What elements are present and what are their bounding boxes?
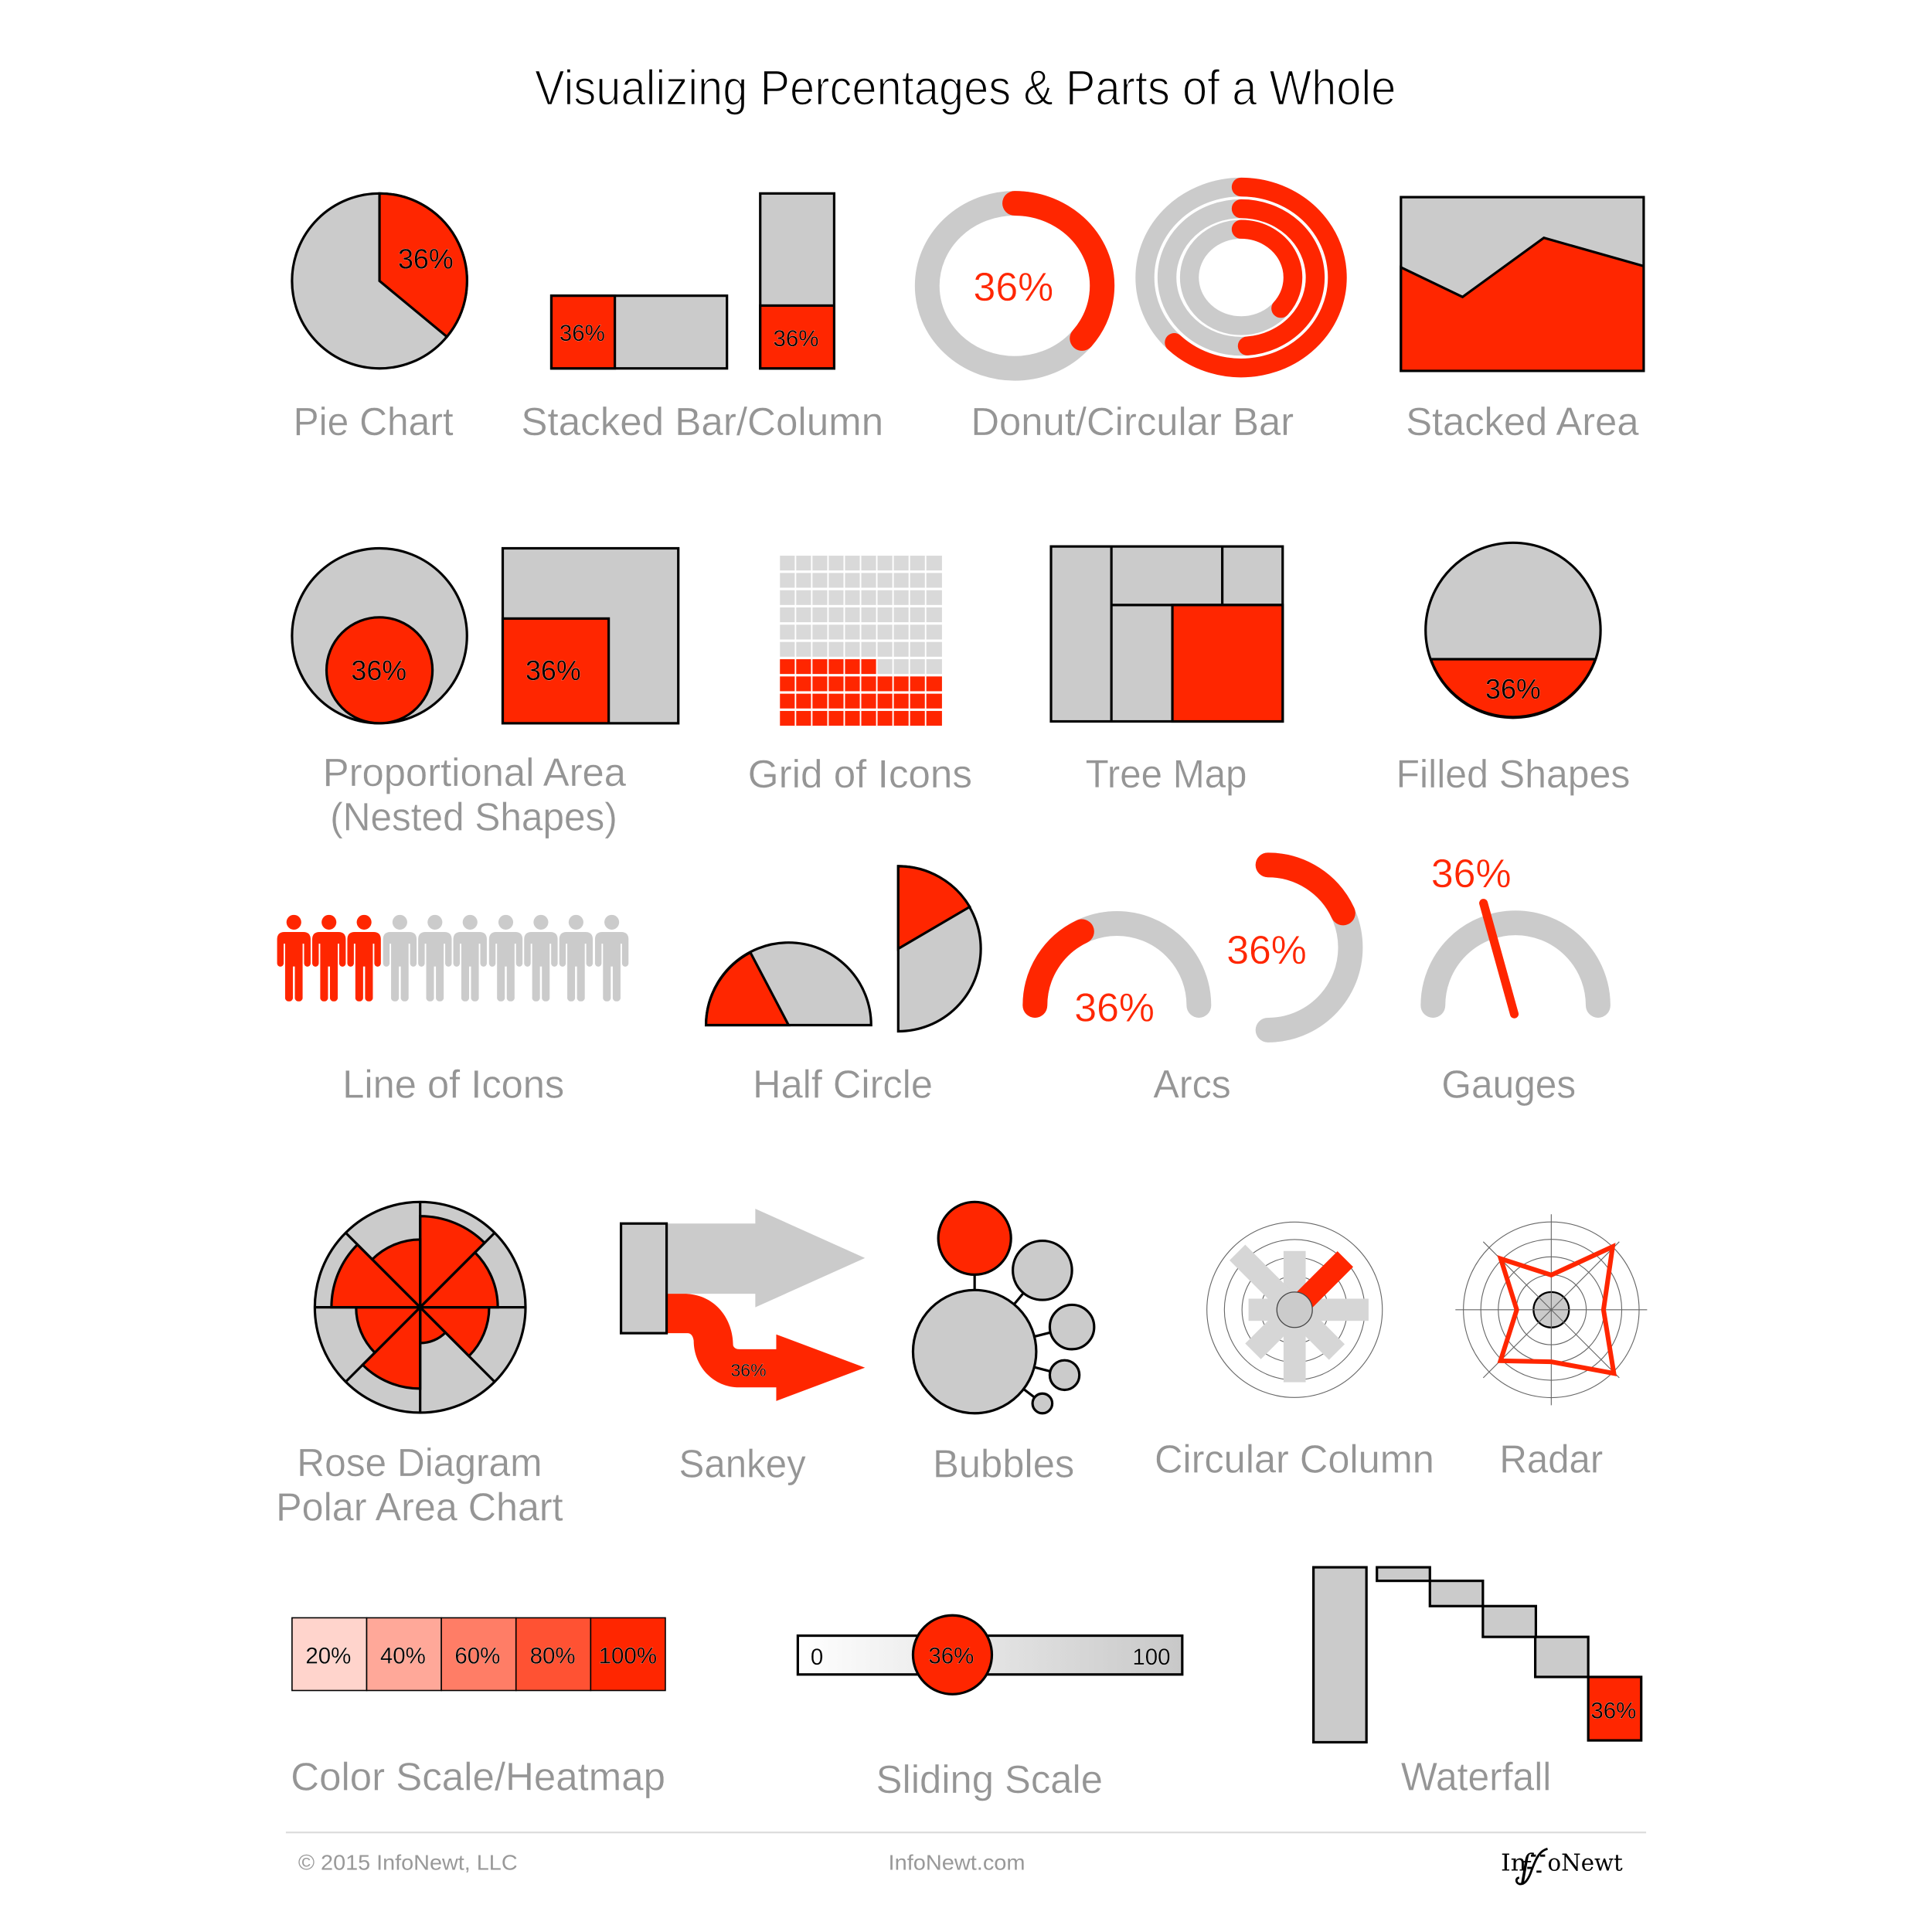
small bubbles bbox=[1013, 1241, 1094, 1413]
icon: lizard bbox=[1516, 1849, 1548, 1884]
rings bbox=[1207, 1222, 1383, 1397]
fill segment bbox=[1430, 659, 1595, 717]
gauge arc bbox=[1433, 923, 1598, 1005]
label: Stacked Bar/Column bbox=[521, 400, 883, 444]
panel: tree map bbox=[1051, 546, 1283, 796]
label: Filled Shapes bbox=[1396, 752, 1630, 796]
red tile bbox=[1172, 605, 1283, 722]
values: 36% bbox=[928, 1643, 974, 1668]
value: 36% bbox=[398, 244, 454, 275]
vertical half circle bbox=[898, 866, 981, 1032]
panel: donut and circular bar bbox=[927, 187, 1338, 444]
panel: circular column bbox=[1155, 1222, 1434, 1481]
gray flow bbox=[667, 1209, 865, 1308]
label: Bubbles bbox=[933, 1442, 1074, 1486]
nested squares bbox=[503, 549, 679, 723]
gray columns bbox=[1230, 1245, 1369, 1383]
label: Rose Diagram bbox=[297, 1440, 543, 1485]
label: Stacked Area bbox=[1406, 400, 1639, 444]
panel: stacked area bbox=[1401, 197, 1644, 444]
nested squares: 36% bbox=[526, 655, 581, 686]
gray people bbox=[383, 915, 628, 1002]
steps bbox=[1377, 1567, 1588, 1677]
stacked column bbox=[760, 193, 834, 369]
label line two: (Nested Shapes) bbox=[330, 795, 617, 839]
star line bbox=[1501, 1247, 1614, 1373]
label: Grid of Icons bbox=[748, 752, 972, 796]
label: Proportional Area bbox=[323, 750, 627, 794]
panel: rose diagram bbox=[276, 1202, 563, 1529]
cells bbox=[292, 1617, 665, 1691]
panel: line of icons bbox=[277, 915, 628, 1107]
red people bbox=[277, 915, 381, 1002]
panel: gauges bbox=[1431, 851, 1598, 1107]
horizontal arc bbox=[1035, 923, 1199, 1005]
outer circle bbox=[315, 1202, 526, 1413]
cell values: 20% bbox=[305, 1643, 351, 1668]
area bbox=[1401, 238, 1644, 371]
cell values: 40% bbox=[380, 1643, 426, 1668]
source block bbox=[621, 1223, 667, 1333]
pie slice bbox=[379, 193, 467, 337]
values: 0 bbox=[811, 1645, 823, 1670]
red flow bbox=[667, 1294, 865, 1401]
website: InfoNewt.com bbox=[889, 1850, 1026, 1874]
horizontal half circle bbox=[706, 943, 871, 1026]
label: Arcs bbox=[1153, 1063, 1231, 1107]
cell values: 60% bbox=[454, 1643, 500, 1668]
panel: pie chart bbox=[292, 193, 467, 444]
cell values: 80% bbox=[530, 1643, 576, 1668]
panel: proportional area bbox=[292, 549, 679, 839]
track bbox=[798, 1636, 1182, 1675]
red sectors bbox=[332, 1216, 498, 1389]
label: Color Scale/Heatmap bbox=[291, 1755, 665, 1799]
title: Visualizing Percentages & Parts of a Whole bbox=[535, 60, 1396, 116]
label: Half Circle bbox=[753, 1063, 933, 1107]
donut bbox=[927, 203, 1102, 369]
panel: stacked bar and column bbox=[521, 193, 883, 444]
logo: In bbox=[1501, 1849, 1526, 1876]
red column bbox=[1287, 1251, 1353, 1318]
value: 36% bbox=[1431, 851, 1512, 896]
connectors bbox=[975, 1238, 1072, 1403]
panel: radar bbox=[1455, 1214, 1647, 1481]
footer rule bbox=[286, 1832, 1646, 1833]
label: Donut/Circular Bar bbox=[971, 400, 1294, 444]
nested circles: 36% bbox=[351, 655, 406, 686]
value: 36% bbox=[1485, 674, 1541, 705]
label: Tree Map bbox=[1086, 752, 1247, 796]
circular bars bbox=[1145, 187, 1338, 368]
panel: color scale bbox=[291, 1617, 665, 1799]
tile dividers bbox=[1111, 546, 1283, 722]
big bubble bbox=[913, 1290, 1036, 1413]
label: Sankey bbox=[679, 1442, 806, 1486]
value: 36% bbox=[1226, 927, 1307, 972]
panel: half circle bbox=[706, 866, 981, 1107]
values bbox=[811, 1643, 1171, 1670]
panel: filled shapes bbox=[1396, 543, 1630, 796]
cell values bbox=[305, 1643, 657, 1668]
donut: 36% bbox=[974, 264, 1053, 309]
spokes bbox=[315, 1202, 526, 1413]
label line two: Polar Area Chart bbox=[276, 1485, 563, 1529]
label: Radar bbox=[1499, 1437, 1603, 1481]
panel: sliding scale bbox=[798, 1615, 1182, 1801]
hub bbox=[1277, 1292, 1312, 1328]
panel: waterfall bbox=[1314, 1567, 1641, 1799]
cell values: 100% bbox=[599, 1643, 657, 1668]
label: Gauges bbox=[1441, 1063, 1576, 1107]
value: 36% bbox=[1074, 985, 1155, 1030]
panel: grid of icons bbox=[748, 556, 972, 796]
value: 36% bbox=[730, 1360, 767, 1380]
values: 100 bbox=[1132, 1645, 1171, 1670]
label: Sliding Scale bbox=[876, 1757, 1103, 1801]
value: 36% bbox=[1590, 1698, 1636, 1723]
stacked column: 36% bbox=[773, 326, 818, 352]
vertical arc bbox=[1268, 865, 1350, 1030]
stacked bar: 36% bbox=[560, 321, 605, 346]
logo: oNewt bbox=[1548, 1849, 1623, 1876]
hub bbox=[1533, 1292, 1569, 1328]
logo: f bbox=[1520, 1845, 1534, 1884]
grid squares bbox=[780, 556, 942, 726]
label: Circular Column bbox=[1155, 1437, 1434, 1481]
marker bbox=[913, 1615, 992, 1694]
nested circles bbox=[292, 549, 467, 723]
total bar bbox=[1314, 1567, 1366, 1742]
stacked bar bbox=[551, 296, 727, 369]
panel: sankey bbox=[621, 1209, 865, 1486]
panel: bubbles bbox=[913, 1202, 1094, 1486]
red bubble bbox=[938, 1202, 1011, 1274]
label: Pie Chart bbox=[293, 400, 454, 444]
copyright: © 2015 InfoNewt, LLC bbox=[298, 1850, 518, 1874]
label: Waterfall bbox=[1401, 1755, 1551, 1799]
red step bbox=[1588, 1677, 1641, 1740]
label: Line of Icons bbox=[342, 1063, 564, 1107]
rings and axes bbox=[1455, 1214, 1647, 1405]
panel: arcs bbox=[1035, 865, 1350, 1107]
logo bbox=[1501, 1845, 1623, 1884]
needle bbox=[1484, 903, 1515, 1014]
